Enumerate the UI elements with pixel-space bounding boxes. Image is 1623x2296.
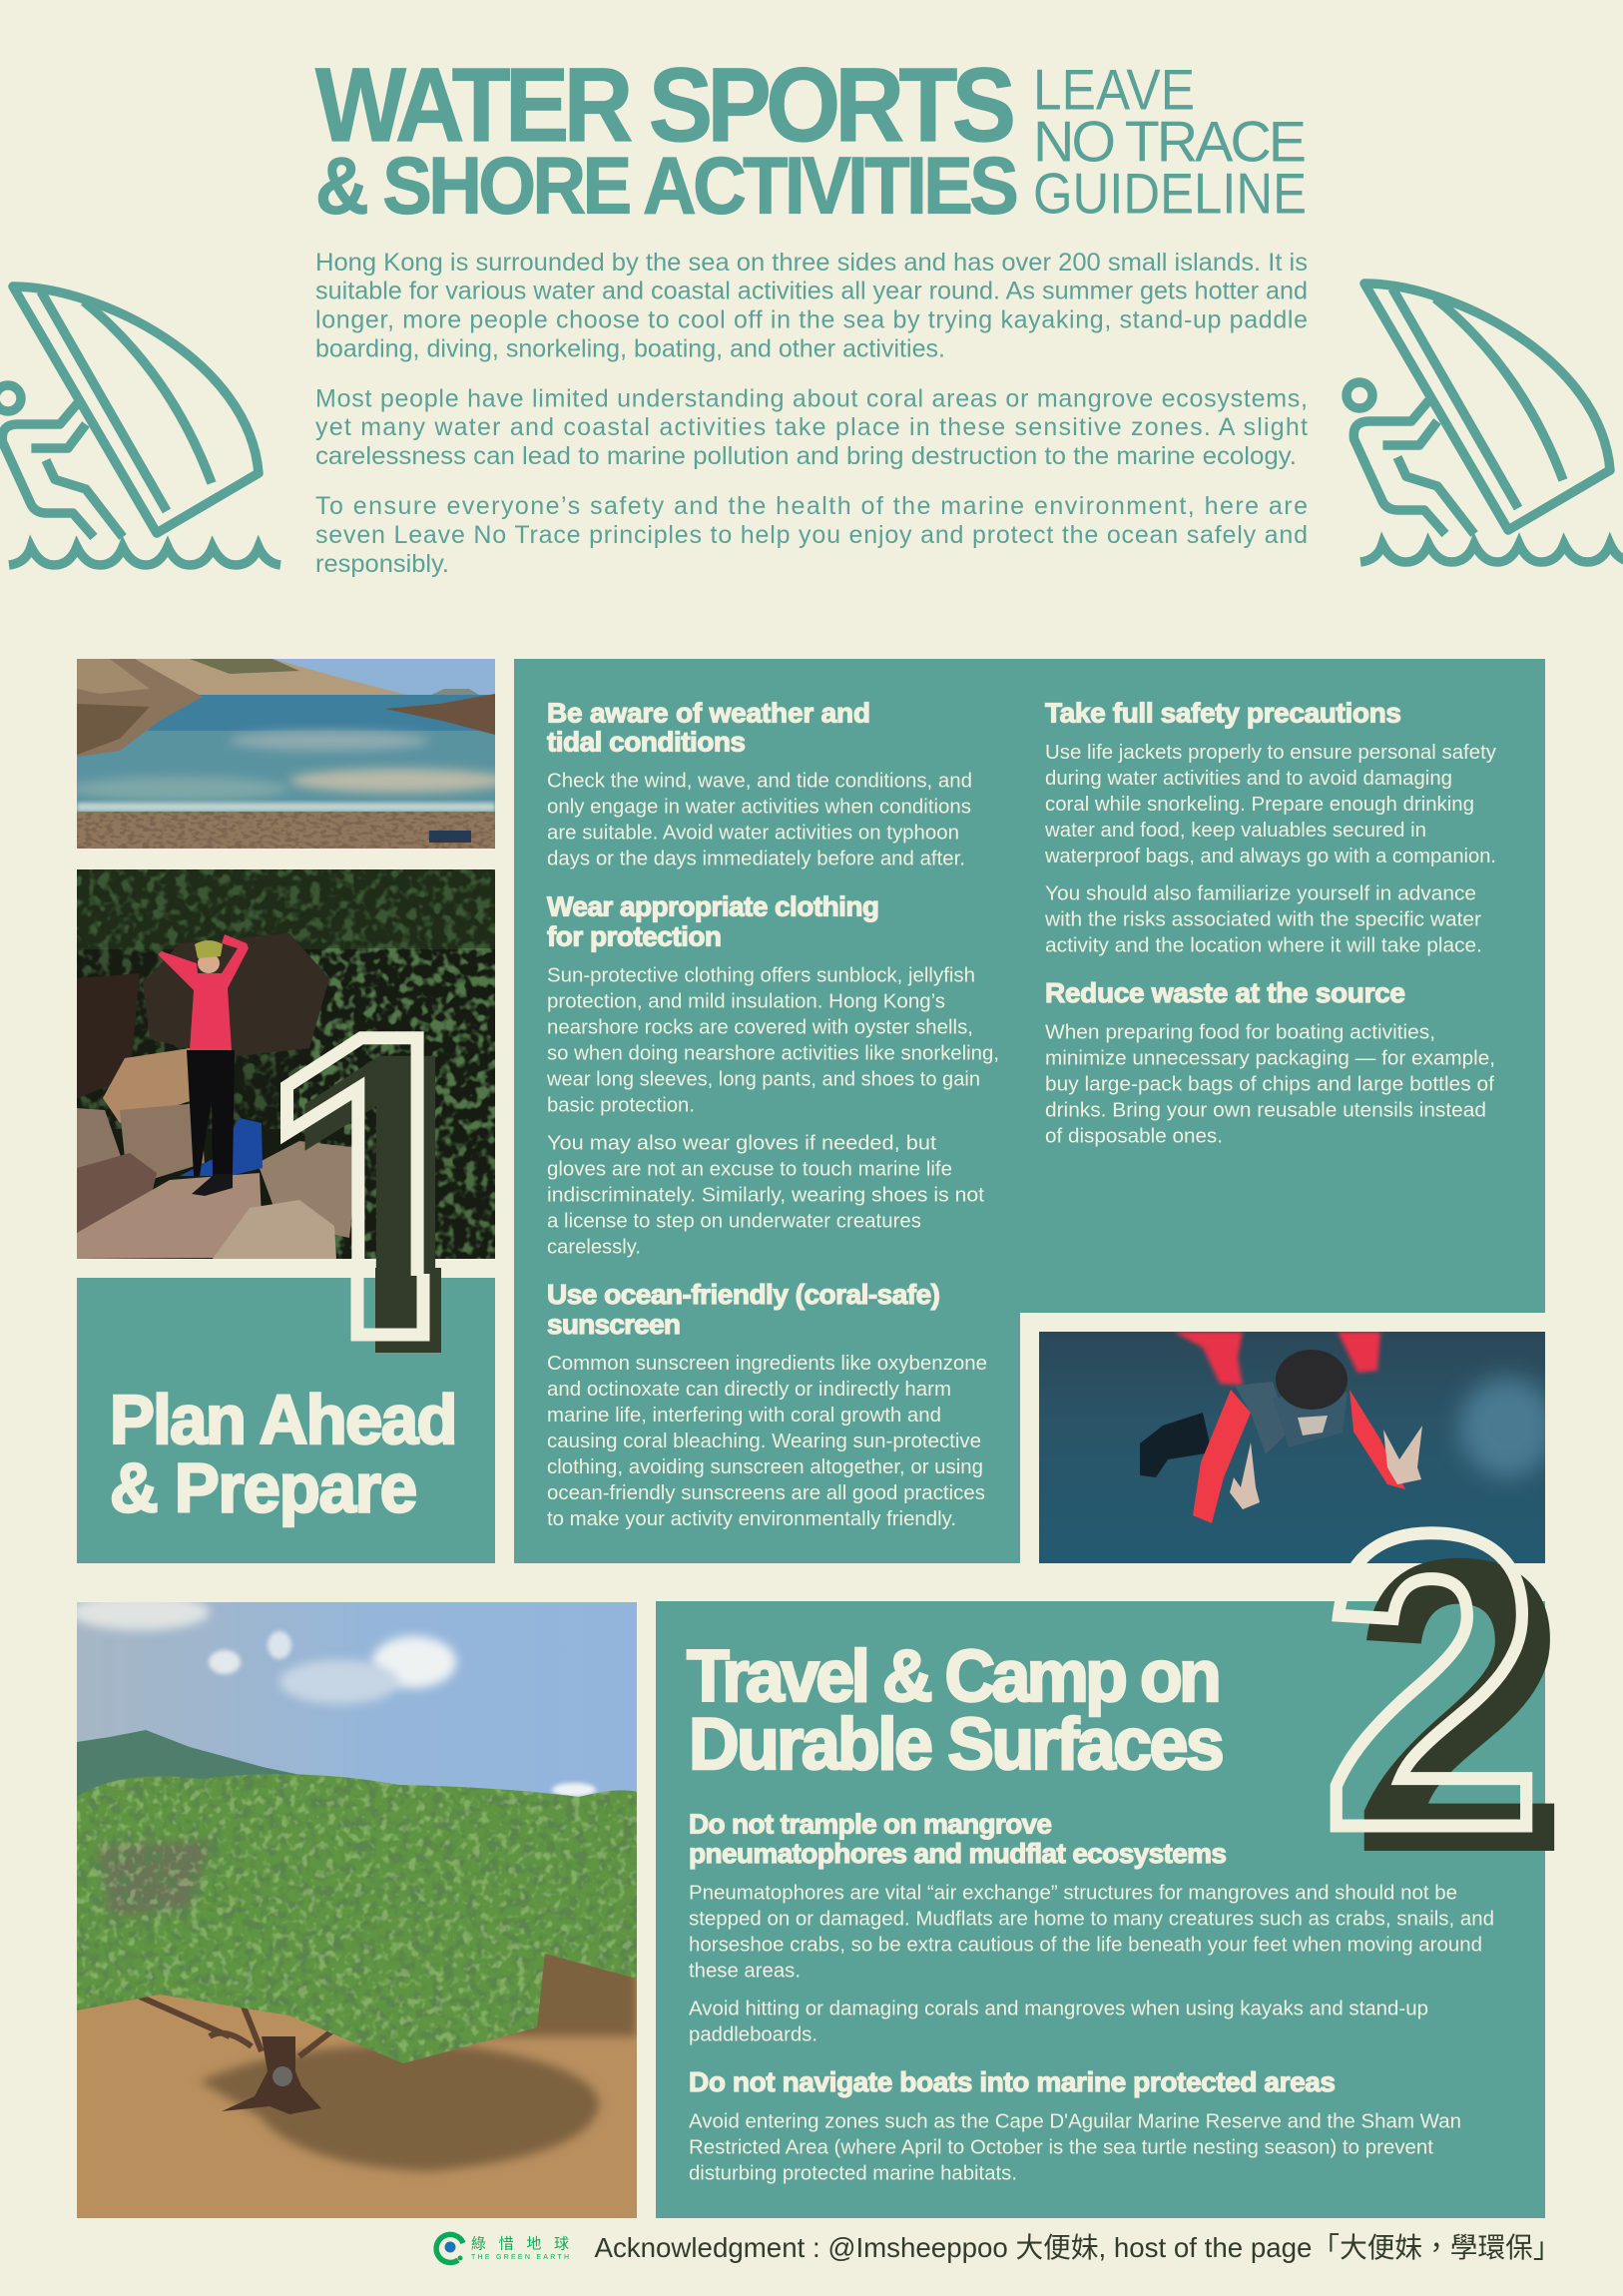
text: clothing (546, 963, 999, 1258)
intro text: suitable for various water and coastal activities all year round. As summer gets hotter and (315, 278, 1308, 305)
intro text (315, 249, 1308, 578)
subtitle: leave no trace guideline (1033, 58, 1307, 226)
photo: woman in rash guard on rocks (77, 869, 495, 1259)
intro text: Most people have limited understanding about coral areas or mangrove ecosystems, (315, 384, 1308, 412)
subtitle: leave no trace guideline: NO TRACE (1033, 110, 1307, 174)
text: safety precautions: water and food, keep valuables secured in (1044, 819, 1426, 842)
text: mangrove: paddleboards. (689, 2022, 817, 2045)
text: mangrove (689, 1881, 1494, 2045)
text: sunscreen: marine life, interfering with coral growth and (547, 1404, 941, 1427)
panel: plan ahead and prepare (77, 1278, 495, 1563)
intro text: seven Leave No Trace principles to help you enjoy and protect the ocean safely and (315, 521, 1308, 549)
text: safety precautions: during water activities and to avoid damaging (1045, 767, 1452, 790)
text: reduce waste: When preparing food for boating activities, (1045, 1020, 1435, 1043)
heading: plan ahead and prepare (110, 1381, 457, 1527)
text: mangrove: Pneumatophores are vital “air exchange” structures for mangroves and should not be (689, 1881, 1457, 1904)
text: clothing: basic protection. (547, 1093, 695, 1116)
panel: tips column (514, 659, 1545, 1563)
heading: weather and tide (547, 697, 870, 758)
text: clothing: so when doing nearshore activities like snorkeling, (547, 1041, 999, 1064)
numeral 1: 1 (275, 962, 515, 1444)
heading: mangrove: pneumatophores and mudflat ecosystems (689, 1838, 1227, 1869)
text: sunscreen: causing coral bleaching. Wearing sun-protective (547, 1430, 981, 1452)
panel: travel and camp on durable surfaces (656, 1601, 1545, 2218)
text: reduce waste: drinks. Bring your own reusable utensils instead (1045, 1098, 1486, 1121)
title (315, 47, 1019, 231)
text: safety precautions (1044, 741, 1497, 957)
text: weather and tide: days or the days immediately before and after. (547, 848, 965, 870)
text: clothing: carelessly. (547, 1235, 641, 1258)
text: weather and tide: Check the wind, wave, and tide conditions, and (547, 770, 972, 793)
heading: marine protected areas: Do not navigate boats into marine protected areas (689, 2066, 1336, 2097)
subtitle: leave no trace guideline: GUIDELINE (1033, 162, 1307, 226)
text: marine protected areas: Restricted Area (where April to October is the sea turtle nesting season) to prevent (689, 2136, 1433, 2159)
heading: plan ahead and prepare: & Prepare (110, 1448, 417, 1527)
text: marine protected areas: Avoid entering zones such as the Cape D'Aguilar Marine Reserve and the Sham Wan (689, 2110, 1461, 2133)
heading: safety precautions: Take full safety precautions (1045, 697, 1401, 728)
photo: underwater snorkeler (1039, 1332, 1555, 1563)
heading: clothing: Wear appropriate clothing (547, 890, 879, 921)
numeral 1: 1 (258, 944, 497, 1427)
text: mangrove: horseshoe crabs, so be extra cautious of the life beneath your feet when moving around (689, 1933, 1482, 1956)
heading: travel and camp: Durable Surfaces (689, 1703, 1225, 1785)
text: safety precautions: You should also familiarize yourself in advance (1045, 882, 1476, 905)
text: safety precautions: with the risks associated with the specific water (1044, 908, 1481, 931)
text: weather and tide (547, 770, 972, 870)
text: clothing: gloves are not an excuse to touch marine life (547, 1157, 952, 1180)
heading: weather and tide: Be aware of weather and (547, 697, 870, 728)
text: sunscreen: Common sunscreen ingredients like oxybenzone (547, 1352, 987, 1375)
text: sunscreen: ocean-friendly sunscreens are all good practices (547, 1481, 985, 1504)
heading: sunscreen: Use ocean-friendly (coral-safe) (547, 1279, 940, 1310)
intro text: carelessness can lead to marine pollution and bring destruction to the marine ecology. (315, 442, 1297, 470)
text: marine protected areas (689, 2110, 1461, 2185)
text: safety precautions: waterproof bags, and always go with a companion. (1044, 845, 1496, 867)
icon: windsurfer left (0, 287, 280, 565)
text: clothing: wear long sleeves, long pants, and shoes to gain (546, 1067, 980, 1090)
text: reduce waste: buy large-pack bags of chips and large bottles of (1045, 1072, 1494, 1095)
heading: clothing: for protection (547, 920, 722, 951)
title: WATER SPORTS (315, 47, 1016, 164)
text: mangrove: stepped on or damaged. Mudflats are home to many creatures such as crabs, snails, and (689, 1907, 1494, 1930)
heading: travel and camp: Travel & Camp on (687, 1635, 1222, 1717)
text: safety precautions: coral while snorkeling. Prepare enough drinking (1045, 793, 1474, 816)
intro text: responsibly. (315, 550, 449, 578)
text: safety precautions: Use life jackets properly to ensure personal safety (1045, 741, 1497, 764)
text: sunscreen (547, 1352, 987, 1530)
text: safety precautions: activity and the location where it will take place. (1045, 934, 1482, 957)
text: sunscreen: to make your activity environmentally friendly. (547, 1507, 956, 1530)
heading: weather and tide: tidal conditions (547, 727, 746, 758)
photo: rocky bay (70, 659, 509, 849)
text: sunscreen: clothing, avoiding sunscreen altogether, or using (547, 1455, 983, 1478)
title: & SHORE ACTIVITIES (315, 142, 1019, 231)
logo: the green earth (436, 2234, 569, 2262)
text: mangrove: Avoid hitting or damaging corals and mangroves when using kayaks and stand-up (689, 1997, 1428, 2019)
text: mangrove: these areas. (689, 1959, 801, 1982)
heading: clothing (547, 890, 879, 951)
logo: the green earth: THE GREEN EARTH (471, 2254, 569, 2261)
heading: mangrove: Do not trample on mangrove (689, 1809, 1052, 1840)
intro text: Hong Kong is surrounded by the sea on three sides and has over 200 small islands. It is (315, 249, 1308, 277)
heading: mangrove (689, 1809, 1227, 1869)
text: weather and tide: only engage in water activities when conditions (547, 796, 971, 819)
heading: sunscreen: sunscreen (547, 1309, 681, 1340)
heading: sunscreen (547, 1279, 940, 1340)
acknowledgment: Acknowledgment : @Imsheeppoo 大便妹, host of the page「大便妹，學環保」 (595, 2232, 1561, 2263)
numeral 2: 2 (1351, 1472, 1570, 1941)
text: sunscreen: and octinoxate can directly or indirectly harm (547, 1378, 951, 1401)
numeral 1 (280, 1031, 441, 1353)
text: marine protected areas: disturbing protected marine habitats. (689, 2162, 1017, 2185)
intro text: To ensure everyone’s safety and the health of the marine environment, here are (315, 492, 1308, 520)
heading: reduce waste: Reduce waste at the source (1045, 977, 1405, 1008)
intro text: boarding, diving, snorkeling, boating, and other activities. (315, 335, 945, 363)
text: reduce waste (1045, 1020, 1495, 1147)
text: clothing: a license to step on underwater creatures (547, 1209, 921, 1232)
intro text: longer, more people choose to cool off in the sea by trying kayaking, stand-up paddle (315, 306, 1308, 334)
text: clothing: nearshore rocks are covered with oyster shells, (547, 1015, 973, 1038)
text: clothing: You may also wear gloves if needed, but (547, 1131, 936, 1154)
intro text: yet many water and coastal activities take place in these sensitive zones. A slight (315, 413, 1308, 441)
text: reduce waste: minimize unnecessary packaging — for example, (1045, 1046, 1495, 1069)
photo: mangrove tree (70, 1594, 637, 2218)
text: clothing: protection, and mild insulation. Hong Kong’s (547, 989, 945, 1012)
numeral 2: 2 (1323, 1447, 1542, 1916)
text: weather and tide: are suitable. Avoid water activities on typhoon (547, 822, 959, 845)
heading: travel and camp (687, 1635, 1225, 1785)
text: clothing: Sun-protective clothing offers sunblock, jellyfish (547, 963, 975, 986)
text: clothing: indiscriminately. Similarly, wearing shoes is not (547, 1183, 984, 1206)
icon: windsurfer right (1347, 284, 1623, 562)
heading: plan ahead and prepare: Plan Ahead (110, 1381, 457, 1458)
logo: the green earth: 綠惜地球 (471, 2236, 569, 2252)
subtitle: leave no trace guideline: LEAVE (1033, 58, 1195, 122)
text: reduce waste: of disposable ones. (1045, 1124, 1223, 1147)
